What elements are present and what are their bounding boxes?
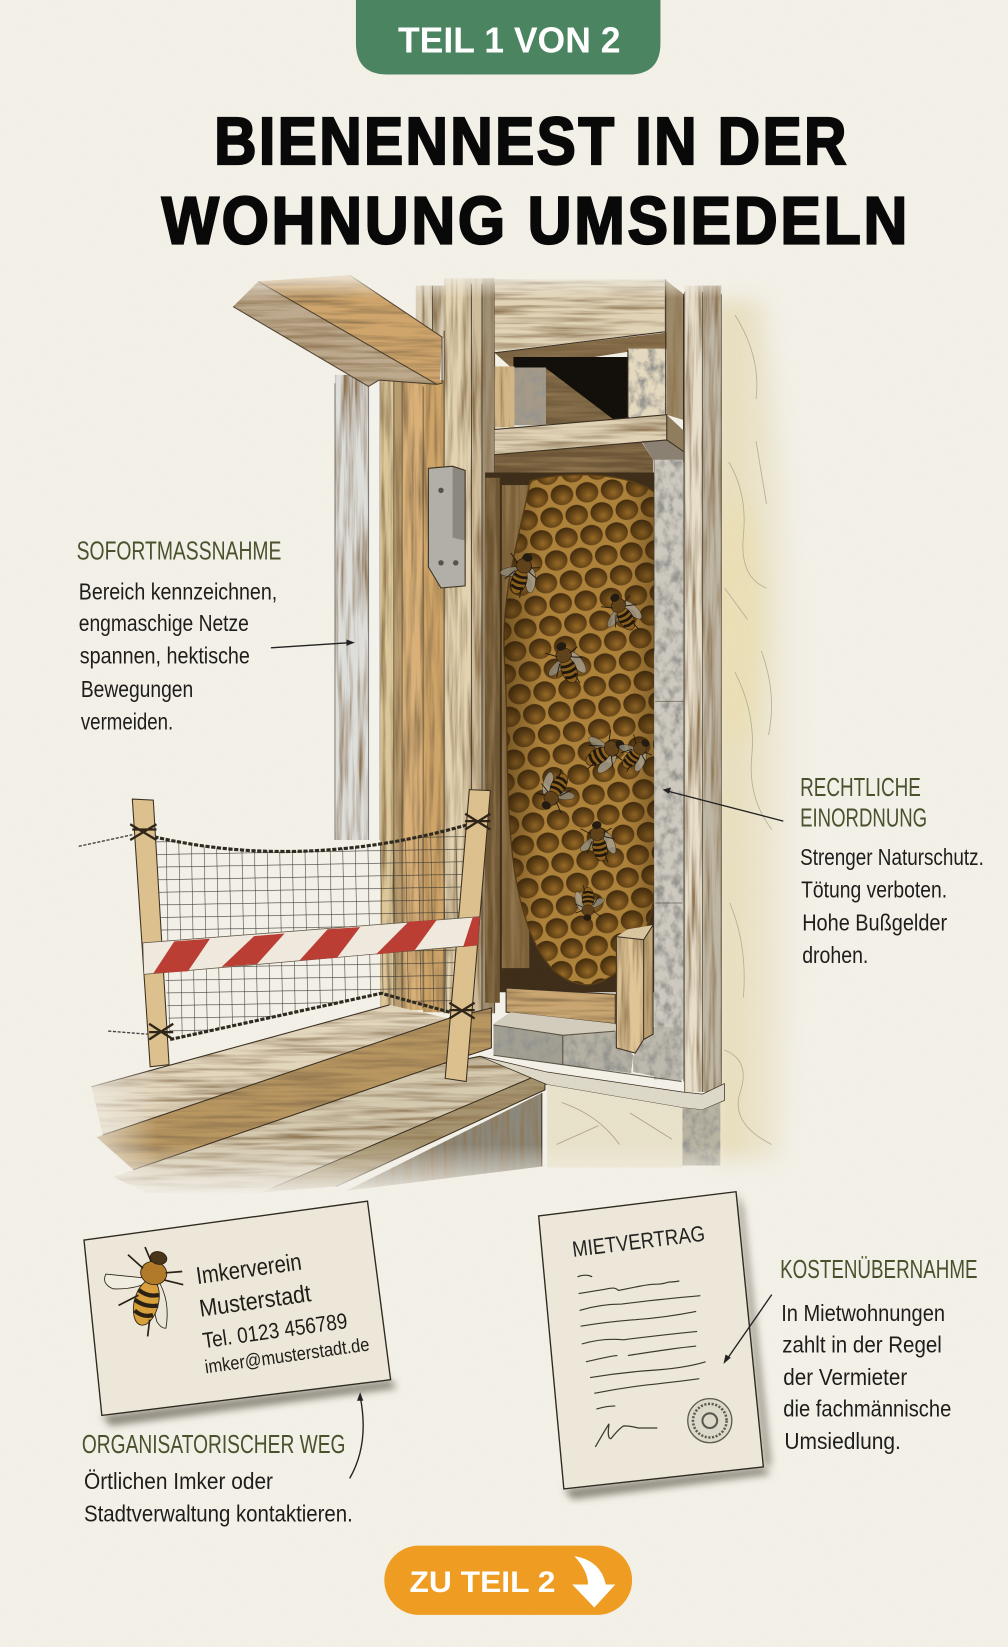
right net post (445, 790, 490, 1082)
title (162, 104, 907, 258)
warning tape (143, 917, 480, 974)
window sill (91, 1005, 725, 1193)
seal (688, 1399, 732, 1443)
window reveal (335, 373, 380, 840)
upper framing in cavity (495, 279, 684, 462)
label: immediate measure: Bereich kennzeichnen, (79, 579, 277, 605)
label: organisational route: Örtlichen Imker oder (84, 1468, 273, 1494)
top badge: part 1 of 2 (356, 0, 660, 75)
cavity floor and stones (494, 988, 681, 1082)
label: cost coverage: der Vermieter (783, 1364, 907, 1390)
arrow: to card (350, 1392, 363, 1478)
stone strip (654, 460, 684, 1082)
title: BIENENNEST IN DER (214, 104, 846, 179)
rental contract (539, 1192, 772, 1499)
top badge: part 1 of 2: TEIL 1 VON 2 (398, 21, 621, 61)
lower framing beam (495, 415, 684, 477)
arrow: to window (271, 639, 355, 648)
label: legal classification: drohen. (802, 942, 868, 968)
plaster wall (714, 299, 803, 1166)
sill fades (63, 271, 819, 1202)
label: cost coverage: die fachmännische (783, 1395, 951, 1421)
label: legal classification (800, 772, 984, 968)
label: immediate measure: Bewegungen (81, 676, 193, 702)
label: organisational route (82, 1429, 353, 1526)
contract heading: MIETVERTRAG (571, 1221, 706, 1262)
label: cost coverage: Umsiedlung. (784, 1428, 901, 1454)
icon: bee (93, 1239, 190, 1342)
card text: imker@musterstadt.de (204, 1334, 371, 1378)
signature (595, 1424, 657, 1447)
metal hinge (428, 466, 465, 588)
bees on comb (493, 546, 659, 921)
label: organisational route: ORGANISATORISCHER WEG (82, 1429, 345, 1459)
label: immediate measure: engmaschige Netze (79, 610, 249, 636)
label: immediate measure: spannen, hektische (80, 643, 250, 669)
card text (194, 1249, 371, 1378)
card text: Musterstadt (198, 1280, 313, 1323)
label: immediate measure: SOFORTMASSNAHME (77, 536, 281, 566)
cavity (485, 473, 658, 1003)
left net post (130, 799, 173, 1067)
card text: Imkerverein (194, 1249, 303, 1290)
label: legal classification: RECHTLICHE (800, 772, 921, 802)
illustration: window frame with bee nest (63, 271, 819, 1202)
honeycomb (493, 475, 659, 985)
vertical post (416, 278, 495, 1013)
right frame (685, 286, 721, 1092)
label: cost coverage: zahlt in der Regel (782, 1331, 942, 1357)
contract scribbled lines (578, 1275, 706, 1409)
card text: Tel. 0123 456789 (201, 1308, 349, 1353)
title: WOHNUNG UMSIEDELN (162, 183, 907, 258)
label: cost coverage: In Mietwohnungen (781, 1300, 945, 1326)
label: immediate measure (77, 536, 281, 735)
button: to part 2 (384, 1546, 632, 1615)
label: organisational route: Stadtverwaltung kontaktieren. (84, 1500, 353, 1526)
arrow: to contract (723, 1295, 772, 1364)
label: legal classification: EINORDNUNG (800, 802, 927, 832)
label: legal classification: Tötung verboten. (801, 877, 947, 903)
window jamb (380, 378, 444, 1012)
icon: curved arrow down (572, 1556, 615, 1608)
arrow: to comb (663, 788, 783, 821)
business card (84, 1201, 397, 1426)
small wood block (616, 925, 653, 1053)
label: legal classification: Hohe Bußgelder (802, 909, 947, 935)
button: to part 2: ZU TEIL 2 (410, 1566, 555, 1599)
lintel beam (233, 275, 442, 386)
label: cost coverage (780, 1254, 978, 1454)
protective net (79, 824, 469, 1040)
label: immediate measure: vermeiden. (81, 709, 173, 735)
